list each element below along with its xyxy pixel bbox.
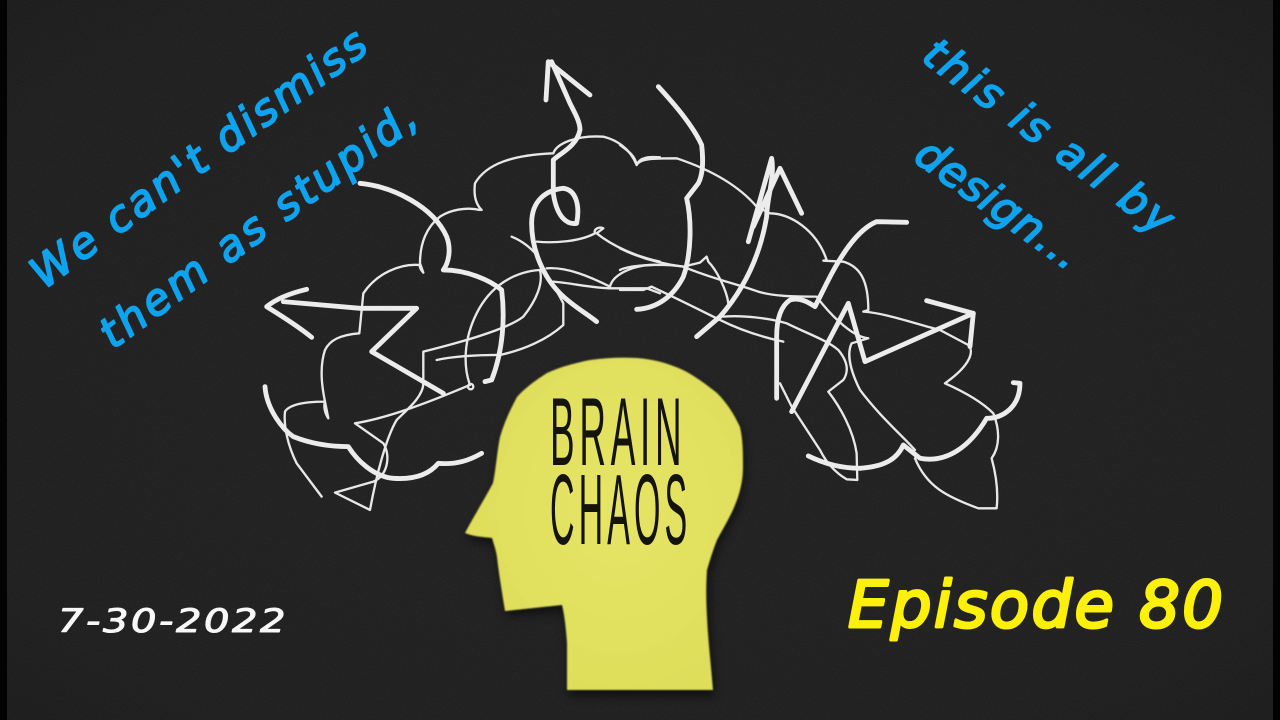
title: CHAOS: CHAOS <box>550 453 691 565</box>
text: design: design... <box>906 128 1091 280</box>
title: BRAIN: BRAIN <box>550 378 686 486</box>
date: 7-30-2022 <box>58 602 286 640</box>
felt head silhouette with title <box>465 358 745 696</box>
text: them as stupid: them as stupid, <box>90 92 427 359</box>
text: we can't dismiss: We can't dismiss <box>21 19 377 299</box>
episode number: Episode 80 <box>848 569 1223 643</box>
scribble: left tangle of chaotic lines <box>265 62 660 510</box>
text: this is all by: this is all by <box>913 29 1184 246</box>
scribble: right tangle of chaotic lines <box>620 87 1020 508</box>
